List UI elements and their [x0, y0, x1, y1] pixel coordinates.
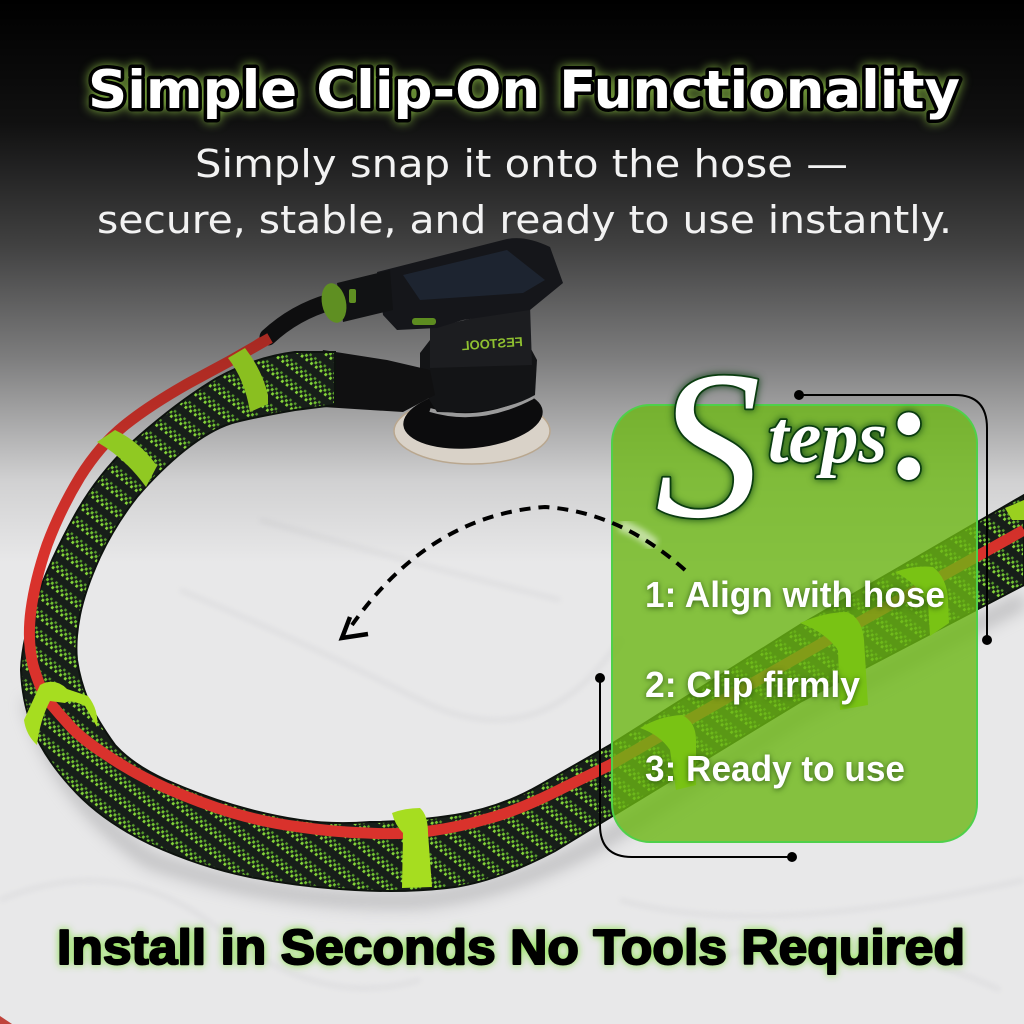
black cable sleeve [268, 302, 330, 337]
clip 2 [97, 430, 157, 487]
clip 7 [895, 567, 949, 636]
switch [412, 318, 436, 325]
handle [377, 238, 563, 330]
logo text: FESTOOL [461, 334, 523, 353]
clip 1 [228, 348, 268, 412]
step 2: 2: Clip firmly [645, 664, 860, 705]
plug marker [349, 289, 356, 303]
subtitle line 1: Simply snap it onto the hose — [195, 142, 848, 186]
green plug ring [318, 281, 350, 325]
connector line: top right [794, 390, 992, 645]
red cable [29, 338, 1024, 834]
bottom tagline: Install in Seconds No Tools Required [57, 921, 965, 975]
step 3: 3: Ready to use [645, 748, 905, 789]
clip 8 [1005, 500, 1024, 520]
steps heading: : [886, 354, 933, 509]
subtitle [97, 142, 952, 242]
neck [430, 305, 532, 368]
panel: steps [612, 405, 977, 842]
clip 4 [392, 808, 432, 888]
dashed arrow [342, 507, 685, 638]
hose [21, 352, 1024, 891]
steps heading: teps [768, 397, 887, 479]
steps heading: S [655, 327, 761, 562]
sander [232, 238, 563, 464]
clips [24, 348, 1024, 888]
silver ring [430, 397, 533, 415]
hose shadow [30, 600, 1024, 900]
subtitle line 2: secure, stable, and ready to use instantly. [97, 198, 952, 242]
motor housing [420, 340, 537, 412]
clip 3 [24, 682, 97, 745]
clip 5 [640, 715, 696, 790]
title: Simple Clip-On Functionality [88, 60, 960, 121]
clip 6 [800, 612, 868, 710]
connector line: bottom left [595, 673, 797, 862]
hose adapter [318, 350, 435, 412]
step 1: 1: Align with hose [645, 574, 945, 615]
sanding pad [394, 398, 550, 464]
power cable [232, 335, 270, 360]
plug [337, 270, 393, 322]
handle top panel [403, 250, 545, 300]
sander base disc [400, 381, 546, 455]
